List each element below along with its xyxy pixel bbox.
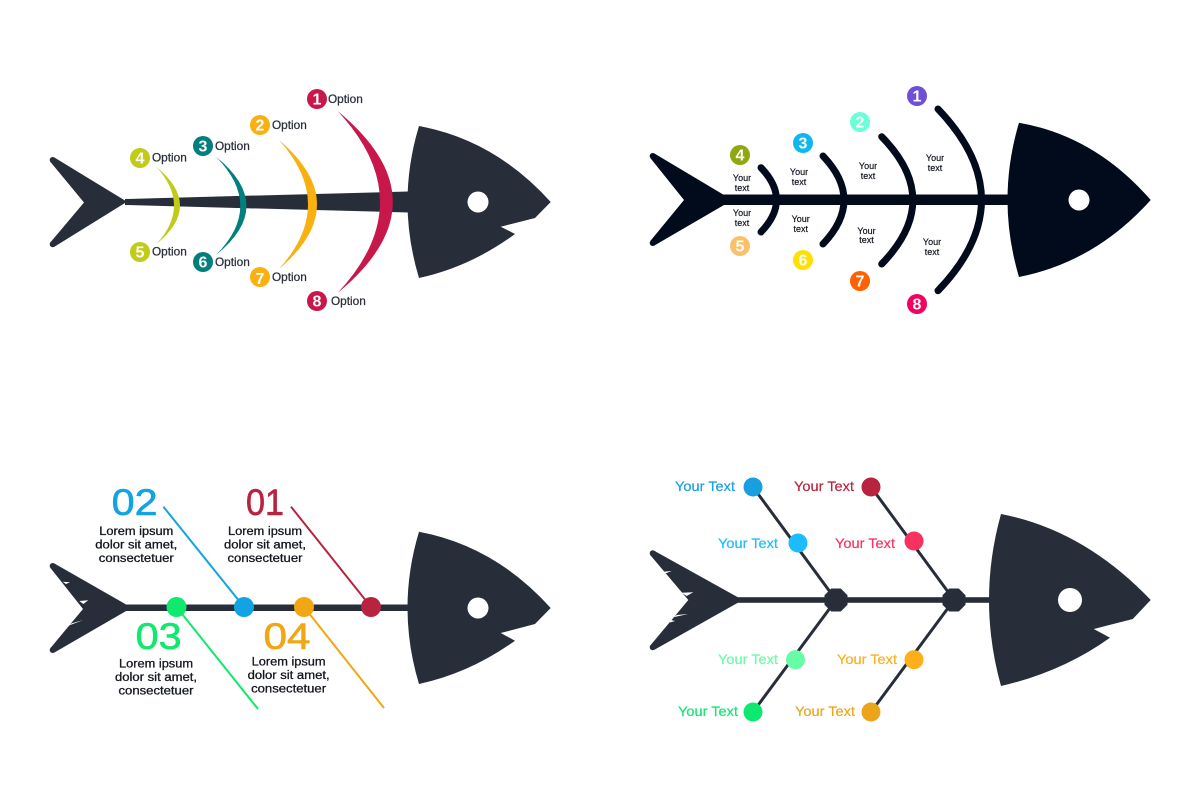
eye (468, 192, 488, 212)
marker 1: 1 (913, 88, 922, 106)
text 02 (95, 526, 177, 565)
text 6 (792, 214, 810, 234)
spine (735, 597, 993, 603)
text 02: Lorem ipsum (99, 526, 173, 538)
text 5: text (735, 218, 750, 228)
label: blue: Your Text (675, 478, 735, 494)
marker 2: 2 (856, 114, 865, 132)
marker 7 (250, 267, 270, 288)
panel: fishbone with crescent ribs (50, 89, 551, 311)
rib: crimson (338, 111, 393, 293)
marker 8: 8 (913, 296, 922, 314)
marker 3: 3 (199, 138, 208, 156)
text 01 (224, 526, 306, 565)
marker 4: 4 (736, 148, 745, 164)
node: mint (786, 650, 805, 669)
line 02 (163, 507, 244, 607)
spine (720, 194, 1010, 205)
node 01 (361, 597, 381, 617)
marker 5: 5 (136, 244, 145, 262)
number 04: 04 (264, 616, 310, 657)
text 7 (857, 226, 876, 245)
label: green: Your Text (678, 703, 738, 719)
marker 1 (307, 89, 327, 109)
marker 1 (907, 86, 927, 106)
text 5 (733, 208, 751, 228)
junction right (942, 588, 966, 612)
tail with notches (50, 563, 127, 653)
panel: fishbone with stroked ribs (650, 86, 1151, 314)
head (408, 126, 551, 278)
text 04: dolor sit amet, (248, 670, 330, 682)
label 7: Option (272, 270, 307, 284)
text 7: text (859, 235, 874, 245)
label: dark red: Your Text (794, 478, 854, 494)
marker 6 (793, 250, 813, 270)
marker 2: 2 (256, 118, 265, 134)
text 3: text (792, 177, 807, 187)
node 02 (234, 597, 254, 617)
marker 7: 7 (856, 274, 865, 290)
rib 1 and 8 (938, 109, 982, 291)
marker 4 (130, 148, 150, 168)
text 8 (923, 237, 941, 257)
text 8: text (925, 247, 940, 257)
rib 2 and 7 (882, 137, 913, 264)
marker 6 (193, 252, 213, 272)
text 01: Lorem ipsum (228, 526, 302, 538)
text 2: text (861, 171, 876, 181)
marker 8 (307, 291, 327, 311)
text 1: text (928, 163, 943, 173)
label: light blue: Your Text (718, 535, 778, 551)
number 01: 01 (246, 482, 284, 523)
node: light blue (788, 534, 808, 552)
text 03: consectetuer (118, 686, 194, 698)
marker 5 (130, 242, 150, 262)
spine (125, 604, 410, 611)
node 03 (166, 597, 186, 617)
junction left (824, 588, 848, 612)
text 1 (926, 153, 944, 173)
node: orange (904, 650, 924, 669)
marker 3 (193, 136, 213, 156)
label 2: Option (272, 118, 307, 132)
marker 3 (793, 133, 813, 153)
marker 8: 8 (313, 294, 322, 310)
text 8: Your (923, 237, 941, 247)
eye (1058, 588, 1082, 612)
number 03: 03 (136, 616, 182, 657)
text 4: Your (733, 173, 751, 183)
text 7: Your (857, 226, 876, 236)
text 03 (115, 658, 197, 698)
panel: fishbone with branching nodes (650, 478, 1151, 722)
text 6: Your (792, 214, 810, 224)
marker 8 (907, 294, 927, 314)
marker 4: 4 (136, 150, 145, 168)
marker 2 (250, 115, 270, 135)
marker 7 (850, 271, 870, 291)
label: amber: Your Text (795, 703, 855, 719)
label: mint: Your Text (718, 651, 778, 667)
marker 3: 3 (799, 136, 808, 152)
tail (50, 157, 127, 247)
label: pink: Your Text (835, 535, 895, 551)
marker 7: 7 (256, 271, 265, 288)
text 04 (248, 656, 330, 696)
marker 4 (730, 145, 750, 165)
rib: teal (216, 157, 246, 255)
rib: lime (156, 167, 180, 244)
line 01 (291, 507, 371, 607)
text 5: Your (733, 208, 751, 218)
marker 5 (730, 236, 750, 256)
label: orange: Your Text (837, 651, 897, 667)
marker 6: 6 (199, 254, 208, 272)
text 03: dolor sit amet, (115, 672, 197, 684)
label 4: Option (152, 151, 187, 165)
node: blue (744, 478, 762, 496)
label 8: Option (331, 294, 366, 308)
head (989, 514, 1151, 686)
text 2: Your (859, 161, 877, 171)
rib 3 and 6 (823, 156, 844, 244)
text 03: Lorem ipsum (119, 658, 193, 670)
tail with notches (650, 550, 738, 650)
marker 5: 5 (736, 238, 745, 256)
tail (650, 153, 724, 246)
tapered spine (125, 192, 408, 212)
marker 6: 6 (799, 252, 808, 270)
branches (753, 487, 954, 712)
rib: orange (279, 140, 317, 269)
text 4 (733, 173, 751, 193)
label 1: Option (328, 92, 363, 106)
text 04: Lorem ipsum (252, 656, 326, 668)
label 6: Option (215, 255, 250, 269)
line 03 (176, 607, 258, 709)
text 3 (790, 167, 808, 187)
node: amber (862, 702, 880, 722)
text 01: dolor sit amet, (224, 540, 306, 552)
head (408, 532, 551, 684)
panel: fishbone with four numbered lines (50, 482, 551, 709)
label 3: Option (215, 139, 250, 153)
text 04: consectetuer (251, 684, 326, 696)
line 04 (304, 607, 384, 708)
text 01: consectetuer (228, 553, 303, 565)
text 1: Your (926, 153, 944, 163)
text 02: consectetuer (99, 553, 174, 565)
node: green (744, 702, 762, 722)
head (1008, 123, 1151, 277)
marker 2 (850, 112, 870, 132)
text 3: Your (790, 167, 808, 177)
marker 1: 1 (313, 92, 322, 108)
text 6: text (793, 224, 808, 234)
node: dark red (862, 478, 880, 496)
eye (1068, 190, 1090, 210)
text 2 (859, 161, 877, 181)
eye (468, 598, 488, 618)
number 02: 02 (112, 482, 158, 523)
rib 4 and 5 (761, 168, 776, 232)
label 5: Option (152, 245, 187, 259)
node 04 (294, 597, 314, 617)
text 4: text (735, 183, 750, 193)
node: pink (904, 532, 924, 550)
text 02: dolor sit amet, (95, 540, 177, 552)
